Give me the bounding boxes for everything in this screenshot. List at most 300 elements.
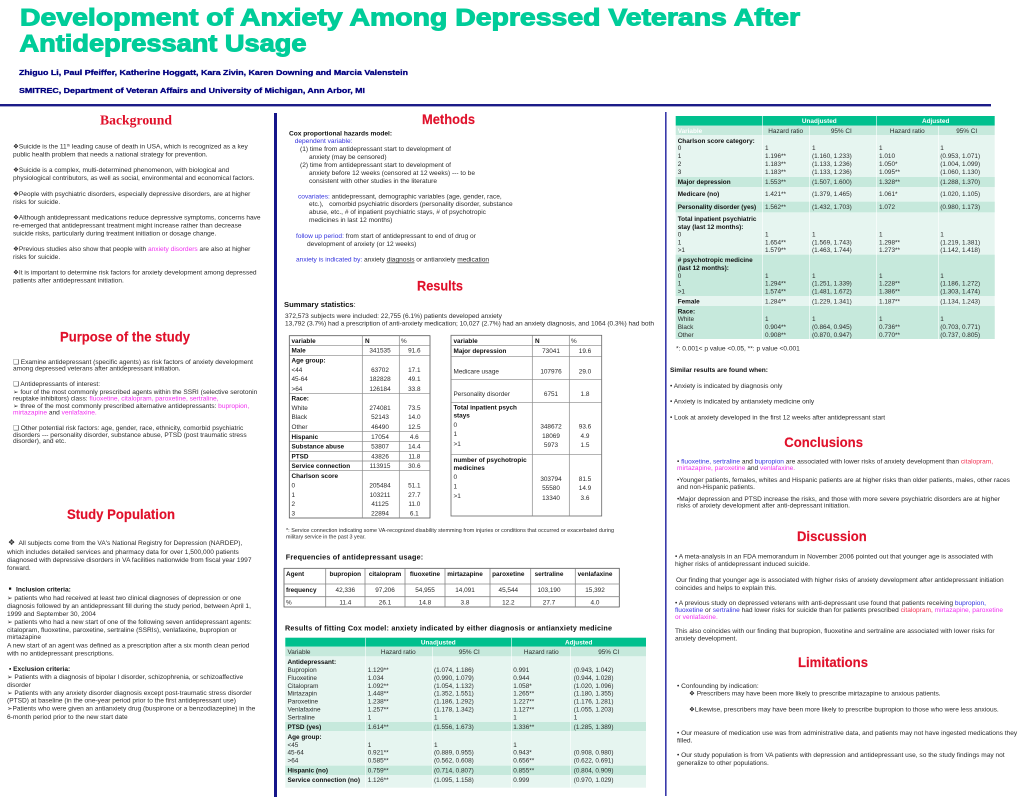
- table: demographics: 14.4: [408, 444, 421, 450]
- discussion text: anxiety development.: [675, 636, 737, 642]
- table: cox model part 1: 1: [434, 742, 438, 749]
- table: cox model part 1: (0.944, 1.028): [574, 675, 613, 682]
- table: clinical characteristics: 1: [454, 484, 458, 490]
- table: cox model part 1: 0.656**: [513, 758, 535, 764]
- table: cox model part 1: Hispanic (no): [288, 768, 328, 774]
- table: cox model part 1: 1.126**: [368, 777, 389, 784]
- limitations text: generalize to other populations.: [677, 760, 769, 767]
- table: cox model part 2: (0.737, 0.805): [940, 332, 980, 339]
- table: cox model part 1: Citalopram: [288, 683, 318, 690]
- table: cox model part 2: Personality disorder (yes): [678, 204, 756, 211]
- table: cox model part 1: 1.448**: [368, 690, 389, 698]
- table: demographics: 103211: [370, 492, 391, 499]
- table: clinical characteristics: 55580: [542, 485, 560, 492]
- table: demographics: Black: [292, 414, 308, 421]
- table: antidepressant frequencies: %: [286, 600, 292, 606]
- table: cox model part 1: 1: [368, 742, 372, 749]
- table: cox model part 1: (1.176, 1.281): [574, 698, 613, 706]
- inclusion criteria: mirtazapine: [7, 634, 41, 641]
- panel: results: [284, 116, 995, 788]
- table: cox model part 2: Other: [678, 332, 695, 339]
- table: cox model part 2: (1.481, 1.672): [812, 288, 852, 296]
- exclusion criteria: (PTSD) at baseline (in the one-year period prior to the first antidepressant use): [7, 698, 236, 704]
- table: demographics: 2: [292, 501, 296, 508]
- table: demographics: 22894: [371, 510, 389, 518]
- table: clinical characteristics: number of psychotropic: [454, 457, 527, 464]
- table: cox model part 1: 1.336**: [513, 724, 535, 731]
- table: clinical characteristics: 6751: [544, 391, 559, 398]
- table: cox model part 1: Fluoxetine: [288, 675, 317, 682]
- table: cox model part 2: Female: [678, 298, 700, 306]
- table: cox model part 2: (last 12 months):: [678, 265, 729, 272]
- table: cox model part 2: 1: [765, 232, 769, 238]
- background text: th: [67, 142, 70, 148]
- table: antidepressant frequencies: 42,336: [336, 587, 356, 594]
- table: clinical characteristics: Medicare usage: [454, 368, 499, 376]
- table: cox model part 2: (1.507, 1.600): [812, 179, 852, 186]
- table: cox model part 2: 1.562**: [765, 204, 786, 211]
- table: cox model part 2: White: [678, 316, 694, 323]
- study intro: diagnosed with depressive disorders in VA facilities nationwide from fiscal year 1997: [7, 557, 252, 564]
- table: demographics: 1: [292, 492, 296, 499]
- table: demographics: <44: [292, 367, 303, 374]
- table: cox model part 1: 0.855**: [513, 768, 535, 774]
- table: demographics: 6.1: [410, 510, 419, 518]
- table: cox model part 1: 1: [513, 742, 517, 749]
- methods text: anxiety (may be censored): [309, 154, 387, 161]
- table: antidepressant frequencies: 45,544: [499, 587, 519, 594]
- background text: re-emerged that antidepressant treatment might increase rather than decrease: [13, 222, 242, 230]
- table: cox model part 1: (0.804, 0.909): [574, 768, 613, 774]
- methods text: anxiety is indicated by: anxiety diagnosis or antianxiety medication: [296, 256, 489, 264]
- table: cox model part 2: 0: [678, 145, 682, 152]
- methods text: (1) time from antidepressant start to development of: [300, 146, 451, 153]
- inclusion criteria: Inclusion criteria:: [16, 586, 71, 594]
- table: cox model part 1: (0.622, 0.691): [574, 758, 613, 764]
- table: cox model part 2: 3: [678, 169, 682, 176]
- table: cox model part 2: 1.196**: [765, 153, 786, 160]
- table: antidepressant frequencies: 27.7: [543, 600, 556, 606]
- table: clinical characteristics: 14.9: [579, 485, 592, 492]
- table: demographics: 63702: [371, 367, 389, 374]
- table: cox model part 1: (0.562, 0.608): [434, 758, 474, 764]
- table: cox model part 2: (1.133, 1.236): [812, 161, 852, 168]
- methods text: Cox proportional hazards model:: [289, 130, 392, 138]
- table: cox model part 2: 1: [812, 273, 816, 280]
- table: cox model part 1: (0.990, 1.079): [434, 675, 474, 682]
- table: cox model part 1: 0.943*: [513, 750, 532, 756]
- table: demographics: Hispanic: [292, 434, 319, 441]
- panel: discussion: [675, 529, 1004, 642]
- table: demographics: 274081: [369, 405, 391, 412]
- inclusion criteria: with no antidepressant prescriptions.: [6, 650, 114, 658]
- conclusions text: risks of anxiety development after anti-depressant initiation.: [677, 502, 850, 510]
- table: clinical characteristics: 1.5: [581, 442, 590, 449]
- purpose text: reuptake inhibitors) class: fluoxetine, citalopram, paroxetine, sertraline,: [13, 396, 219, 402]
- table: cox model part 2: 1.386**: [879, 288, 900, 296]
- table: clinical characteristics: >1: [454, 441, 461, 448]
- table: demographics: 341535: [369, 348, 391, 354]
- table: cox model part 2: 1: [765, 145, 769, 152]
- table: cox model part 1: Hazard ratio: [381, 649, 416, 656]
- table: cox model part 2: 1: [940, 232, 944, 238]
- similar results notes: • Anxiety is indicated by antianxiety medicine only: [670, 398, 815, 406]
- methods text: covariates: antidepressant, demographic variables (age, gender, race,: [298, 194, 502, 200]
- title: Antidepressant Usage: [20, 30, 306, 58]
- table footnote: military service in the past 3 year.: [286, 534, 366, 540]
- table: clinical characteristics: 19.6: [579, 348, 592, 355]
- inclusion criteria: ➢ patients who had received at least two clinical diagnoses of depression or one: [7, 595, 241, 602]
- purpose text: ➢ three of the most commonly prescribed alternative antidepressants: bupropion,: [13, 403, 249, 410]
- table: cox model part 2: (1.303, 1.474): [940, 288, 980, 296]
- table: clinical characteristics: 13340: [542, 495, 560, 502]
- conclusions text: • fluoxetine, sertraline and bupropion are associated with lower risks of anxiety development than citalopram,: [677, 458, 993, 466]
- table: clinical characteristics: 0: [454, 474, 458, 481]
- table: demographics: 12.5: [408, 424, 421, 431]
- table: antidepressant frequencies: 103,190: [537, 587, 561, 594]
- summary statistics heading: Summary statistics:: [284, 300, 356, 309]
- table: cox model part 1: 1.058*: [513, 683, 532, 690]
- purpose text: ❑ Other potential risk factors: age, gender, race, ethnicity, comorbid psychiatric: [13, 425, 244, 432]
- panel: methods: [289, 112, 513, 264]
- table: cox model part 1: 0.585**: [368, 758, 389, 764]
- table: cox model part 2: 1: [879, 316, 883, 323]
- table: antidepressant frequencies: 11.4: [339, 600, 352, 606]
- table: cox model part 1: Paroxetine: [288, 698, 318, 706]
- table: cox model part 2: 1.298**: [879, 240, 900, 246]
- table: cox model part 2: (0.864, 0.945): [812, 324, 852, 331]
- table: cox model part 2: Hazard ratio: [890, 128, 925, 135]
- discussion text: or venlafaxine.: [675, 614, 718, 621]
- table: antidepressant frequencies: Agent: [286, 571, 305, 578]
- table: cox model part 2: 1.421**: [765, 191, 786, 198]
- table: cox model part 2: 1.574**: [765, 288, 786, 296]
- table: demographics: PTSD: [292, 454, 309, 460]
- table: cox model part 1: 1.238**: [368, 698, 389, 706]
- table: cox model part 2: (1.463, 1.744): [812, 247, 852, 254]
- limitations text: ❖ Prescribers may have been more likely to prescribe mirtazapine to anxious patients.: [689, 690, 941, 698]
- table: antidepressant frequencies: 12.2: [502, 600, 515, 606]
- purpose text: ❑ Antidepressants of interest:: [13, 381, 100, 388]
- table: demographics: White: [292, 405, 308, 412]
- table: demographics: Male: [292, 348, 306, 354]
- table: cox model part 1: PTSD (yes): [288, 724, 321, 731]
- table: cox model part 1: Venlafaxine: [288, 706, 321, 714]
- table: cox model part 2: (1.134, 1.243): [940, 298, 980, 306]
- table: cox model part 1: 1.614**: [368, 724, 389, 731]
- table: cox model part 2: (0.703, 0.771): [940, 324, 980, 331]
- table: clinical characteristics: 303794: [540, 476, 562, 483]
- similar results notes: • Look at anxiety developed in the first 12 weeks after antidepressant start: [670, 414, 885, 422]
- table: cox model part 1: 0.991: [513, 667, 530, 674]
- methods text: abuse, etc., # of inpatient psychiatric stays, # of psychotropic: [309, 209, 487, 216]
- table: cox model part 2: [676, 116, 995, 339]
- exclusion criteria: ▪ Exclusion criteria:: [9, 666, 70, 673]
- affiliation: SMITREC, Department of Veteran Affairs and University of Michigan, Ann Arbor, MI: [19, 86, 365, 95]
- table: cox model part 1: (0.714, 0.807): [434, 768, 474, 774]
- inclusion criteria: diagnosis followed by an antidepressant fill during the study period, between April 1,: [7, 603, 251, 610]
- table: cox model part 2: 1.187**: [879, 298, 900, 306]
- table: cox model part 1: Bupropion: [288, 667, 317, 674]
- table: clinical characteristics: 1: [454, 431, 458, 438]
- table: antidepressant frequencies: citalopram: [369, 571, 401, 578]
- table: demographics: 51.1: [408, 482, 421, 490]
- limitations text: • Confounding by indication:: [677, 683, 759, 690]
- table: cox model part 1: 1.034: [368, 675, 384, 682]
- summary statistics text: 372,573 subjects were included: 22,755 (6.1%) patients developed anxiety: [285, 313, 503, 320]
- inclusion criteria: ➢ patients who had a new start of one of the following seven antidepressant agents:: [7, 619, 252, 626]
- table: demographics: 113915: [370, 463, 391, 470]
- discussion text: • A meta-analysis in an FDA memorandum in November 2006 pointed out that younger age is associated with: [675, 554, 993, 560]
- table: antidepressant frequencies: 14,091: [455, 587, 475, 594]
- table: clinical characteristics: Major depression: [454, 348, 507, 355]
- table: clinical characteristics: 3.6: [581, 495, 590, 502]
- heading: limitations: Limitations: [798, 655, 868, 670]
- table: cox model part 2: 1: [940, 273, 944, 280]
- table: demographics: 52143: [371, 414, 389, 421]
- limitations text: filled.: [677, 738, 693, 744]
- table: cox model part 2: # psychotropic medicine: [678, 257, 753, 264]
- table: cox model part 2: Hazard ratio: [768, 128, 804, 135]
- table: cox model part 2: 0.908**: [765, 332, 786, 339]
- table: cox model part 2: (1.060, 1.130): [940, 169, 980, 176]
- heading: results: Results: [417, 278, 463, 294]
- table: cox model part 2: 1: [812, 316, 816, 323]
- table: antidepressant frequencies: 54,955: [415, 587, 435, 594]
- methods text: (2) time from antidepressant start to development of: [300, 162, 451, 169]
- table: demographics: 73.5: [408, 405, 421, 412]
- table: cox model part 2: Race:: [678, 308, 695, 316]
- table: demographics: 11.8: [408, 454, 421, 460]
- table: cox model part 1: Hazard ratio: [524, 649, 559, 656]
- table: cox model part 2: 1.061*: [879, 191, 898, 198]
- table: cox model part 2: 0.770**: [879, 332, 900, 339]
- conclusions text: mirtazapine, paroxetine and venlafaxine.: [677, 465, 795, 472]
- panel: purpose of the study: [13, 330, 258, 445]
- table: cox model part 1: Mirtazapin: [288, 690, 317, 698]
- table: cox model part 1: 1.227**: [513, 698, 535, 706]
- methods text: medicines in last 12 months): [309, 217, 392, 224]
- table: cox model part 1: 1: [574, 714, 578, 722]
- limitations text: • Our study population is from VA patients with depression and antidepressant use, so the study findings may not: [677, 752, 1005, 759]
- table: demographics: 14.0: [408, 414, 421, 421]
- table: cox model part 1: 1.092**: [368, 683, 389, 690]
- table: cox model part 2: 1: [940, 316, 944, 323]
- title: Development of Anxiety Among Depressed Veterans After: [20, 4, 800, 32]
- table: demographics: 33.8: [408, 386, 421, 393]
- table: demographics: 4.6: [410, 434, 419, 441]
- inclusion criteria: [6, 584, 252, 658]
- table: cox model part 2: (1.569, 1.743): [812, 240, 852, 246]
- heading: purpose: Purpose of the study: [60, 330, 190, 344]
- table: cox model part 2: 1.328**: [879, 179, 900, 186]
- heading: methods: Methods: [422, 112, 475, 127]
- table: cox model part 1: 1.129**: [368, 667, 389, 674]
- inclusion criteria: A new start of an agent was defined as a prescription after a six month clean period: [7, 642, 250, 650]
- table: demographics: 53807: [371, 444, 389, 450]
- table: cox model part 2: Total inpatient psychiatric: [678, 216, 757, 223]
- table: cox model part 2: 1: [678, 153, 682, 160]
- table: demographics: 91.6: [408, 348, 421, 354]
- table: demographics: Other: [292, 424, 308, 431]
- exclusion criteria: 6-month period prior to the new start date: [7, 714, 128, 721]
- inclusion criteria: citalopram, fluoxetine, paroxetine, sertraline (SSRIs), venlafaxine, bupropion or: [7, 627, 237, 634]
- table: cox model part 1: Sertraline: [288, 714, 315, 722]
- table: cox model part 2: 1: [765, 316, 769, 323]
- panel: limitations: [677, 655, 1018, 767]
- table: clinical characteristics: Total inpatient psych: [454, 404, 517, 412]
- inclusion criteria: 1999 and September 30, 2004: [7, 611, 96, 618]
- table: cox model part 2: (1.432, 1.703): [812, 204, 852, 211]
- table: antidepressant frequencies: 3.8: [461, 600, 470, 606]
- table: antidepressant frequencies: paroxetine: [492, 571, 525, 578]
- table: cox model part 1: 0.759**: [368, 768, 389, 774]
- table: cox model part 2: Major depression: [678, 179, 731, 186]
- table: cox model part 1: Service connection (no): [288, 777, 360, 784]
- table: cox model part 2: 1: [879, 273, 883, 280]
- table: antidepressant frequencies: fluoxetine: [410, 571, 441, 578]
- methods text: follow up period: from start of antidepressant to end of drug or: [296, 233, 477, 240]
- table: cox model part 1: (1.556, 1.673): [434, 724, 474, 731]
- table: cox model part 2: 1: [678, 240, 682, 246]
- study intro: [6, 538, 252, 572]
- background text: suicide risks, particularly during treatment initiation or dosage change.: [13, 230, 216, 238]
- summary statistics text: 13,792 (3.7%) had a prescription of anti-anxiety medication; 10,027 (2.7%) had an anxiety diagnosis, and 1064 (0.3%) had both: [285, 320, 654, 328]
- table: clinical characteristics: 107976: [540, 368, 562, 376]
- conclusions text: •Younger patients, females, whites and Hispanic patients are at higher risks than older patients, males, other races: [677, 477, 1011, 484]
- background text: ❖It is important to determine risk factors for anxiety development among depressed: [13, 270, 257, 276]
- table: cox model part 2: 95% CI: [956, 128, 977, 135]
- table: demographics: 46490: [371, 424, 389, 431]
- table: cox model part 1: 95% CI: [598, 649, 619, 656]
- table: demographics: Substance abuse: [292, 444, 345, 450]
- table: cox model part 2: 0.904**: [765, 324, 786, 331]
- table: demographics: 126184: [369, 386, 391, 393]
- table: antidepressant frequencies: sertraline: [535, 571, 564, 578]
- table: cox model part 2: 1.228**: [879, 280, 900, 288]
- table: cox model part 2: stay (last 12 months):: [678, 224, 743, 231]
- table: cox model part 1: Adjusted: [565, 640, 592, 646]
- purpose text: among depressed veterans after antidepressant initiation.: [13, 366, 181, 372]
- discussion text: higher risks of antidepressant induced suicide.: [675, 561, 810, 568]
- table: cox model part 2: (1.004, 1.099): [940, 161, 980, 168]
- limitations text: • Our measure of medication use was from administrative data, and patients may not have ingested medications they: [677, 730, 1018, 737]
- table: demographics: %: [401, 338, 407, 345]
- methods text: anxiety before 12 weeks (censored at 12 weeks) --- to be: [309, 170, 475, 177]
- table: cox model part 1: 45-64: [288, 750, 304, 756]
- table: cox model part 1: (0.908, 0.980): [574, 750, 613, 756]
- exclusion criteria: ➢ Patients with a diagnosis of bipolar I disorder, schizophrenia, or schizoaffective: [7, 674, 243, 681]
- panel: study population: [6, 507, 256, 721]
- purpose text: ❑ Examine antidepressant (specific agents) as risk factors of anxiety development: [13, 359, 253, 366]
- table: cox model part 1: (1.180, 1.355): [574, 690, 613, 698]
- table: cox model part 2: 1: [812, 145, 816, 152]
- table: antidepressant frequencies: frequency: [286, 587, 317, 594]
- limitations text: [677, 683, 1018, 767]
- table: demographics: >64: [292, 386, 303, 393]
- table: cox model part 1: (1.074, 1.186): [434, 667, 474, 674]
- table: cox model part 1: Unadjusted: [421, 640, 456, 646]
- table: cox model part 1: 1.265**: [513, 690, 535, 698]
- table: cox model part 1: Age group:: [288, 734, 322, 741]
- exclusion criteria: [7, 666, 256, 721]
- panel: conclusions: [677, 435, 1011, 510]
- methods text: [289, 130, 513, 264]
- table: cox model part 2: Adjusted: [922, 118, 949, 125]
- table: cox model part 2: (1.160, 1.233): [812, 153, 852, 160]
- table footnote: *: Service connection indicating some VA-recognized disability stemming from injuries or conditions that occurred or exacerbated during: [286, 528, 614, 534]
- title: [20, 4, 800, 58]
- table: demographics: Charlson score: [292, 473, 338, 480]
- table: cox model part 2: Charlson score category:: [678, 138, 755, 145]
- table: cox model part 1: (1.352, 1.551): [434, 690, 474, 698]
- table: cox model part 2: 1.579**: [765, 247, 786, 254]
- table: cox model part 2: 1: [812, 232, 816, 238]
- table: demographics: Service connection: [292, 463, 350, 470]
- table: clinical characteristics: %: [571, 338, 577, 345]
- table: cox model part 2: (1.020, 1.105): [940, 191, 980, 198]
- table: antidepressant frequencies: venlafaxine: [578, 571, 613, 578]
- table: antidepressant frequencies: mirtazapine: [447, 571, 483, 578]
- table: cox model part 2: 0.736**: [879, 324, 900, 331]
- table: cox model part 2: 1.050*: [879, 161, 898, 168]
- table: cox model part 1: 1: [368, 714, 372, 722]
- table: antidepressant frequencies: 14.8: [419, 600, 432, 606]
- background text: ❖People with psychiatric disorders, especially depressive disorders, are at higher: [13, 191, 251, 198]
- conclusions text: and non-Hispanic patients.: [677, 484, 755, 491]
- table: cox model part 1: >64: [288, 758, 299, 764]
- table: cox model part 2: (1.219, 1.381): [940, 240, 980, 246]
- study intro: which includes detailed services and pharmacy data for over 1,500,000 patients: [6, 549, 240, 556]
- methods text: etc.), comorbid psychiatric disorders (personality disorder, substance: [309, 201, 513, 208]
- table: cox model part 2: 1.553**: [765, 179, 786, 186]
- table: antidepressant frequencies: 97,206: [375, 587, 395, 594]
- table: antidepressant frequencies: [284, 568, 619, 607]
- table: cox model part 1: 1.257**: [368, 706, 389, 714]
- table: cox model part 1: 0.921**: [368, 750, 389, 756]
- table: cox model part 1: (1.186, 1.292): [434, 698, 474, 706]
- table: cox model part 2: (0.870, 0.947): [812, 332, 852, 339]
- table: cox model part 2: (1.229, 1.341): [812, 298, 852, 306]
- heading: cox model results: Results of fitting Cox model: anxiety indicated by either diagnosis or antianxiety medicine: [285, 624, 612, 632]
- heading: discussion: Discussion: [797, 529, 867, 544]
- table: cox model part 2: (1.133, 1.236): [812, 169, 852, 176]
- background text: ❖Although antidepressant medications reduce depressive symptoms, concerns have: [13, 214, 261, 222]
- authors: Zhiguo Li, Paul Pfeiffer, Katherine Hoggatt, Kara Zivin, Karen Downing and Marcia Valenstein: [19, 68, 408, 77]
- study intro: ❖ All subjects come from the VA's National Registry for Depression (NARDEP),: [8, 538, 242, 547]
- table: cox model part 2: 1.072: [879, 204, 895, 211]
- table: cox model part 2: >1: [678, 247, 685, 254]
- summary statistics text: [285, 313, 654, 328]
- table: demographics: 27.7: [408, 492, 421, 499]
- table: demographics: Race:: [292, 396, 309, 402]
- table: cox model part 2: 1.010: [879, 153, 895, 160]
- table: clinical characteristics: variable: [454, 338, 478, 345]
- discussion text: coincides and helps to explain this.: [675, 585, 777, 592]
- table: cox model part 2: 1.095**: [879, 169, 900, 176]
- discussion text: fluoxetine or sertraline had lower risks for suicide than for patients prescribed citalopram, mirtazapine, paroxetine: [675, 607, 1003, 614]
- table: clinical characteristics: 0: [454, 422, 458, 429]
- methods text: consistent with other studies in the literature: [309, 178, 437, 185]
- table: cox model part 2: 1: [678, 280, 682, 288]
- table: cox model part 1: [285, 638, 646, 788]
- table: clinical characteristics: 5973: [544, 442, 559, 449]
- table: cox model part 1: (1.055, 1.203): [574, 706, 613, 714]
- background text: ❖Suicide is the 11: [13, 144, 67, 150]
- table: cox model part 2: 1.273**: [879, 247, 900, 254]
- conclusions text: [677, 458, 1011, 510]
- table: cox model part 2: 1: [765, 273, 769, 280]
